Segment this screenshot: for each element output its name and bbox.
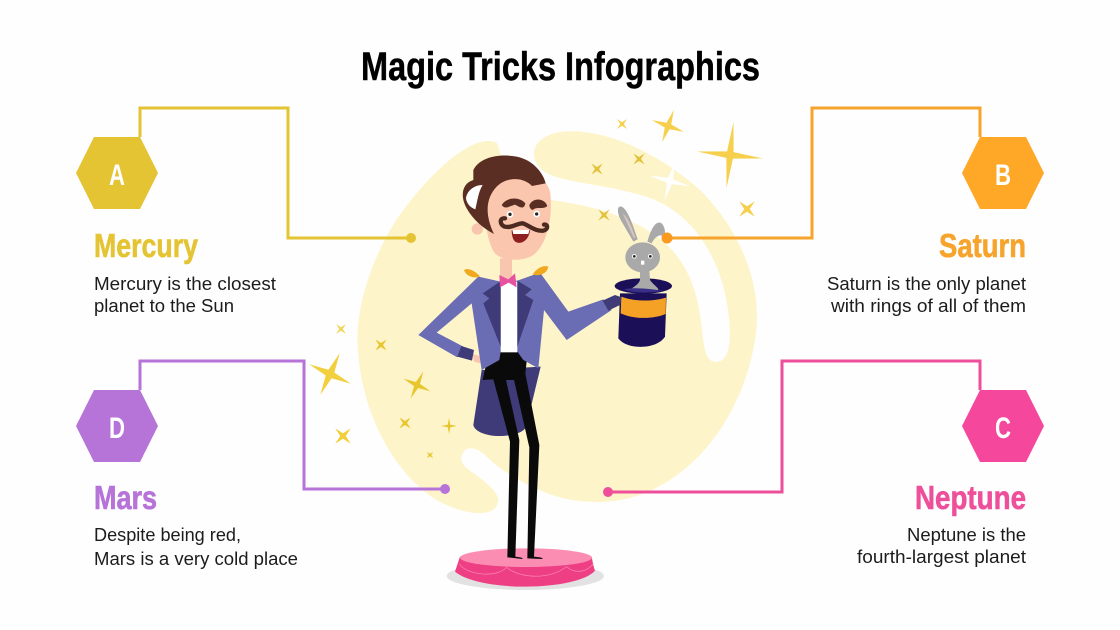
text Mars bbox=[94, 525, 298, 569]
hexagon A: A bbox=[109, 159, 125, 192]
tailcoat and legs bbox=[473, 347, 543, 559]
title: Magic Tricks Infographics bbox=[361, 45, 760, 89]
pedestal bbox=[447, 548, 604, 590]
upper body bbox=[418, 155, 672, 370]
background blob bbox=[357, 131, 757, 513]
text Neptune bbox=[857, 525, 1026, 567]
hexagon B bbox=[962, 137, 1044, 209]
hexagon D bbox=[76, 390, 158, 462]
text Mercury: Mercury is the closest bbox=[94, 274, 276, 294]
sparkles: upper right bbox=[586, 104, 766, 226]
text Mercury: planet to the Sun bbox=[94, 296, 234, 316]
text Saturn: Saturn is the only planet bbox=[827, 274, 1026, 294]
text Mars: Mars is a very cold place bbox=[94, 549, 298, 569]
sparkles: lower left bbox=[299, 319, 457, 461]
text Saturn bbox=[827, 274, 1026, 316]
text Mars: Despite being red, bbox=[94, 525, 241, 545]
text Neptune: fourth-largest planet bbox=[857, 547, 1026, 567]
connector A bbox=[140, 108, 416, 243]
text Mercury bbox=[94, 274, 276, 316]
heading Neptune: Neptune bbox=[915, 479, 1026, 516]
hexagon C bbox=[962, 390, 1044, 462]
magician bbox=[418, 155, 672, 559]
connector D bbox=[140, 361, 450, 494]
hexagon B: B bbox=[995, 159, 1011, 192]
connector C bbox=[603, 361, 980, 497]
rabbit and hat bbox=[603, 206, 672, 347]
text Saturn: with rings of all of them bbox=[830, 296, 1026, 316]
text Neptune: Neptune is the bbox=[907, 525, 1026, 545]
hexagon D: D bbox=[109, 412, 125, 445]
heading Mars: Mars bbox=[94, 479, 157, 516]
heading Mercury: Mercury bbox=[94, 227, 199, 264]
hexagon C: C bbox=[995, 412, 1011, 445]
head bbox=[463, 155, 551, 260]
heading Saturn: Saturn bbox=[939, 227, 1026, 264]
hexagon A bbox=[76, 137, 158, 209]
connector B bbox=[662, 108, 980, 244]
